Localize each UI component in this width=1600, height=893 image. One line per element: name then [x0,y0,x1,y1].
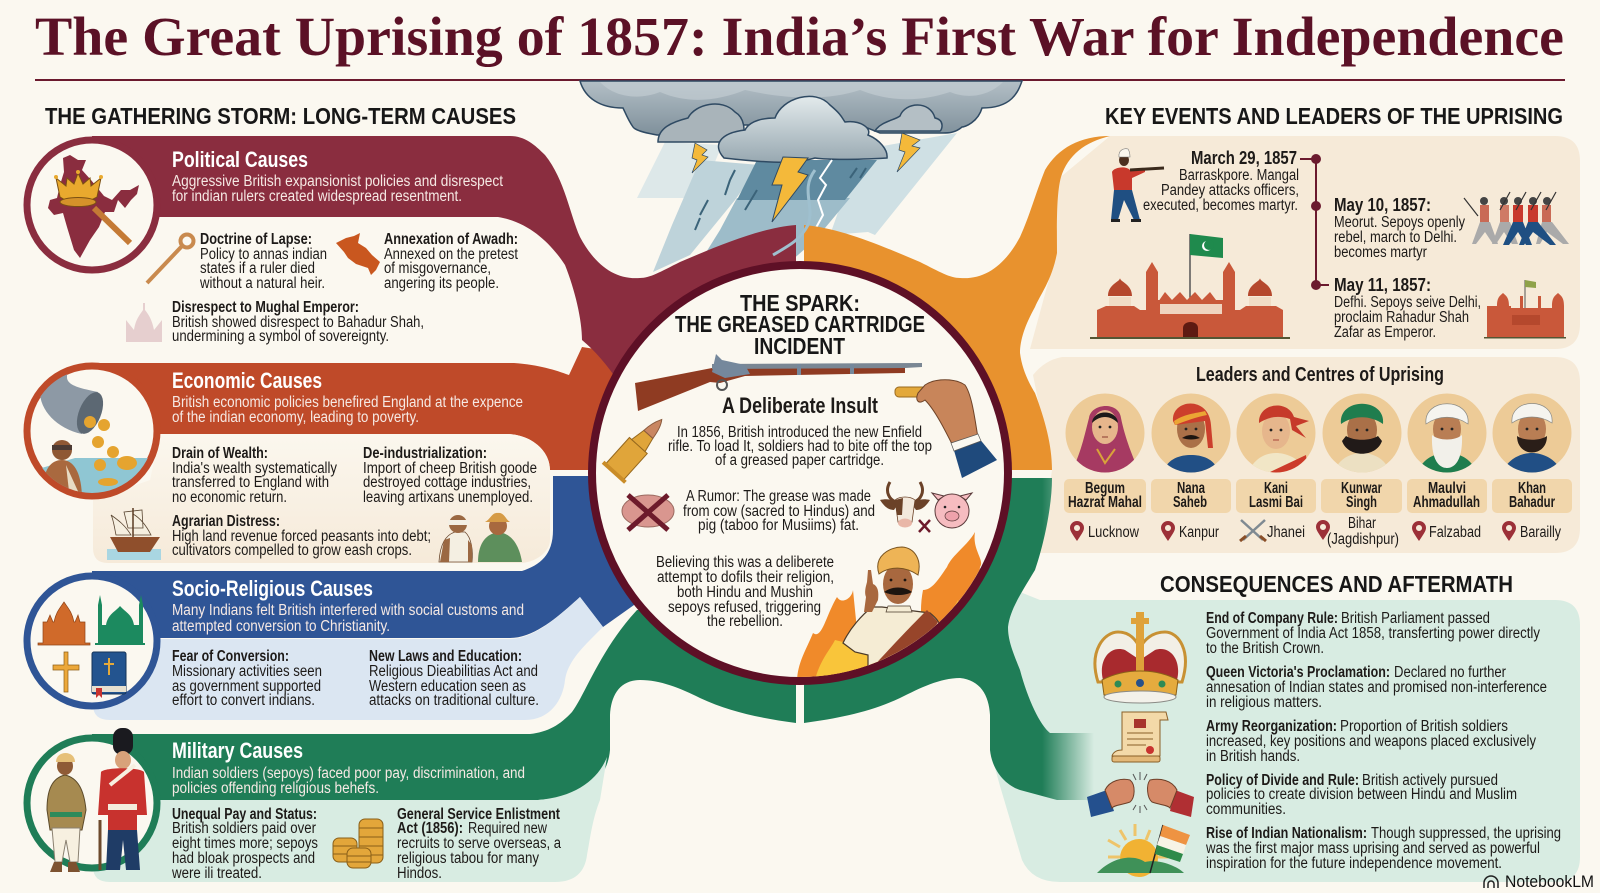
annexation of Awadh: angering its people. [384,275,499,292]
doctrine of lapse: Doctrine of Lapse: [200,231,312,248]
spark heading: THE GREASED CARTRIDGE [675,311,925,337]
unequal pay and status: were ili treated. [171,865,262,882]
leader names: Saheb [1173,494,1207,511]
general service enlistment act: religious tabou for many [397,850,539,867]
new laws and education: attacks on traditional culture. [369,692,539,709]
queen victoria's proclamation [1206,664,1547,711]
disrespect to Mughal emperor: undermining a symbol of sovereignty. [172,328,389,345]
icon: hand with cartridge [895,380,997,478]
military intro: Indian soldiers (sepoys) faced poor pay, discrimination, and [172,765,525,782]
panel: key events background [1030,136,1580,349]
military intro: policies offending religious behefs. [172,780,379,797]
army reorganization [1206,718,1536,765]
panel: socio-religious detail background [93,597,603,720]
general service enlistment act: Act (1856): [397,820,463,837]
storm tail [773,170,815,255]
panel: leaders [1064,364,1572,548]
political intro: for indian rulers created widespread resentment. [172,188,462,205]
panel: military ribbon [92,600,796,800]
economic icon: wealth drain [27,366,160,500]
economic intro: British economic policies benefired England at the expence [172,394,523,411]
text: rumor: pig (taboo for Musiims) fat. [698,517,859,534]
unequal pay and status: British soldiers paid over [172,820,316,837]
icon: sunrise with Indian flag [1097,824,1190,877]
centres with pins [1070,515,1561,548]
icon: scepter [147,234,194,283]
leader names: Ahmadullah [1413,494,1480,511]
political icon: India crown [27,140,157,270]
may 10 event: Meorut. Sepoys openly [1334,214,1465,231]
fear of conversion: effort to convert indians. [172,692,315,709]
general service enlistment act: Hindos. [397,865,442,882]
military intro [172,765,525,797]
central circle [592,265,1008,681]
portrait: Maulvi Ahmadullah [1408,394,1486,473]
orange ribbon [804,136,1110,470]
heading: consequences: CONSEQUENCES AND AFTERMATH [1160,571,1513,597]
panel: political ribbon [92,136,796,465]
annexation of Awadh [384,231,519,292]
end of company rule: British Parliament passed [1341,610,1490,627]
drain of wealth: transferred to England with [172,474,329,491]
leader names: Kunwar [1341,480,1382,497]
text: deliberate attempt: sepoys refused, triggering [668,599,821,616]
unequal pay and status: Unequal Pay and Status: [172,806,317,823]
portrait: Kunwar Singh [1322,394,1402,473]
disrespect to Mughal emperor [172,299,424,345]
annexation of Awadh: Annexation of Awadh: [384,231,518,248]
icon: coin stacks [333,819,383,868]
agrarian distress: Agrarian Distress: [172,513,280,530]
icon: Mangal Pandey with rifle [1111,149,1164,222]
drain of wealth: India's wealth systematically [172,460,337,477]
political intro: Aggressive British expansionist policies and disrespect [172,173,504,190]
icon: small fort [1484,280,1566,338]
fear of conversion: Missionary activities seen [172,663,322,680]
rise of Indian nationalism [1205,825,1561,872]
portrait: Begum Hazrat Mahal [1066,394,1144,473]
unequal pay and status: had bloak prospects and [172,850,315,867]
end of company rule: Government of India Act 1858, transferting power directly [1206,625,1540,642]
leader names: Hazrat Mahal [1068,494,1142,511]
policy of divide and rule [1206,772,1517,818]
panel: socio-religious causes [27,576,539,709]
may 10 event: becomes martyr [1334,244,1427,261]
text: enfield rifle: of a greased paper cartridge. [715,452,884,469]
text: deliberate attempt: attempt to dofils their religion, [657,569,834,586]
new laws and education: Religious Dieabilitias Act and [369,663,538,680]
leader names [1068,480,1555,511]
timeline [1300,154,1329,290]
queen victoria's proclamation: Declared no further [1394,664,1506,681]
doctrine of lapse: states if a ruler died [200,260,315,277]
unequal pay and status [171,806,318,882]
heading: causes: THE GATHERING STORM: LONG-TERM CAUSES [45,103,516,129]
text: deliberate attempt: both Hindu and Mushin [677,584,813,601]
icon: clashing fists [1087,772,1194,817]
may 11 event: May 11, 1857: [1334,275,1431,295]
de-industrialization [363,445,537,506]
centres with pins: Barailly [1520,524,1561,541]
general service enlistment act: recruits to serve overseas, a [397,835,561,852]
icon: scroll [1112,712,1168,762]
rise of Indian nationalism: inspiration for the future independence movement. [1206,855,1502,872]
de-industrialization: destroyed cottage industries, [363,474,531,491]
annexation of Awadh: of misgovernance, [384,260,491,277]
army reorganization: Proportion of British soldiers [1340,718,1508,735]
annexation of Awadh: Annexed on the pretest [384,246,519,263]
de-industrialization: De-industrialization: [363,445,487,462]
drain of wealth: no economic return. [172,489,287,506]
centres with pins: Lucknow [1088,524,1140,541]
title: The Great Uprising of 1857: India’s First War for Independence [35,6,1564,67]
end of company rule: to the British Crown. [1206,640,1324,657]
may 11 event [1334,275,1481,341]
text: enfield rifle [668,424,932,469]
disrespect to Mughal emperor: Disrespect to Mughal Emperor: [172,299,359,316]
doctrine of lapse: without a natural heir. [199,275,325,292]
fear of conversion: Fear of Conversion: [172,648,289,665]
general service enlistment act [397,806,561,882]
panel: economic ribbon base [92,347,796,470]
rise of Indian nationalism: Though suppressed, the uprising [1371,825,1561,842]
text: rumor: from cow (sacred to Hindus) and [683,503,875,520]
may 10 event: May 10, 1857: [1334,195,1431,215]
panel: economic causes [27,366,537,562]
leader names: Khan [1518,480,1546,497]
leader names: Maulvi [1428,480,1466,497]
panel: military causes: Military Causes [172,738,303,763]
may 11 event: Defhi. Sepoys seive Delhi, [1334,294,1481,311]
panel: political causes: Political Causes [172,147,308,172]
march 29 event: Barraskpore. Mangal [1179,167,1299,184]
fear of conversion [172,648,322,709]
military icon: sepoy and British soldier [27,728,157,872]
policy of divide and rule: Policy of Divide and Rule: [1206,772,1359,789]
leader names: Nana [1177,480,1205,497]
spark heading: INCIDENT [754,333,845,359]
rise of Indian nationalism: was the first major mass uprising and served as powerful [1205,840,1540,857]
panel: military detail background [93,757,607,882]
centres with pins: Kanpur [1179,524,1219,541]
economic intro: of the indian economy, leading to poverty. [172,409,419,426]
spark heading [675,290,925,359]
agrarian distress: cultivators compelled to grow eash crops. [172,542,412,559]
army reorganization: Army Reorganization: [1206,718,1337,735]
agrarian distress: High land revenue forced peasants into debt; [172,528,431,545]
green ribbon right [804,478,1094,800]
socio-religious intro [172,602,524,635]
queen victoria's proclamation: Queen Victoria's Proclamation: [1206,664,1390,681]
queen victoria's proclamation: annesation of Indian states and promised non-interference [1206,679,1547,696]
panel: socio-religious ribbon [92,476,796,638]
storm illustration [580,81,1022,272]
economic intro [172,394,523,426]
may 10 event [1334,195,1465,261]
may 11 event: proclaim Rahadur Shah [1334,309,1469,326]
icon: sepoy and flames [797,532,981,680]
icon: pig [919,493,972,532]
panel: military causes [27,728,561,882]
rise of Indian nationalism: Rise of Indian Nationalism: [1206,825,1367,842]
queen victoria's proclamation: in religious matters. [1206,694,1322,711]
icon: marching soldiers [1464,192,1569,245]
heading: a deliberate insult: A Deliberate Insult [722,393,879,418]
doctrine of lapse [199,231,327,292]
panel: economic causes: Economic Causes [172,368,322,393]
policy of divide and rule: British actively pursued [1362,772,1498,789]
may 10 event: rebel, march to Delhi. [1334,229,1457,246]
text: rumor [683,488,875,534]
portrait: Rani Lakshmi Bai [1236,394,1316,473]
icon: crossed-out meat [622,495,674,530]
march 29 event: March 29, 1857 [1191,148,1297,168]
panel: political causes [27,140,519,345]
end of company rule [1206,610,1540,657]
general service enlistment act: General Service Enlistment [397,806,560,823]
doctrine of lapse: Policy to annas indian [200,246,327,263]
icon: Red Fort with flag [1090,234,1290,339]
text: enfield rifle: In 1856, British introduced the new Enfield [677,424,922,441]
icon: faded crown [126,303,162,342]
centres with pins: Falzabad [1429,524,1481,541]
socio-religious intro: Many Indians felt British interfered with social customs and [172,602,524,619]
icon: bullet [602,409,673,484]
general service enlistment act: Required new [468,820,548,837]
march 29 event: Pandey attacks officers, [1161,182,1299,199]
policy of divide and rule: policies to create division between Hindu and Muslim [1206,786,1517,803]
icon: British crown [1095,612,1185,703]
text: deliberate attempt [656,554,834,630]
de-industrialization: leaving artixans unemployed. [363,489,533,506]
unequal pay and status: eight times more; sepoys [172,835,318,852]
march 29 event: executed, becomes martyr. [1143,197,1298,214]
text: deliberate attempt: Believing this was a deliberete [656,554,834,571]
new laws and education: Western education seen as [369,678,526,695]
icon: rifle [635,354,922,411]
panel: leaders: Leaders and Centres of Uprising [1196,364,1444,386]
panel: socio-religious causes: Socio-Religious Causes [172,576,373,601]
new laws and education [369,648,539,709]
march 29 event [1143,148,1299,214]
leader names: Kani [1264,480,1288,497]
text: enfield rifle: rifle. To load It, soldiers had to bite off the top [668,438,932,455]
NotebookLM mark: NotebookLM [1505,872,1594,891]
name plates [1064,479,1572,513]
socio-religious icons [27,576,157,706]
may 11 event: Zafar as Emperor. [1334,324,1436,341]
socio-religious intro: attempted conversion to Christianity. [172,618,390,635]
end of company rule: End of Company Rule: [1206,610,1338,627]
portrait: Nana Saheb [1152,394,1230,473]
policy of divide and rule: communities. [1206,801,1286,818]
text: deliberate attempt: the rebellion. [707,613,783,630]
icon: peasants [439,513,522,562]
centres with pins: Bihar [1348,515,1376,532]
disrespect to Mughal emperor: British showed disrespect to Bahadur Shah, [172,314,424,331]
portrait: Khan Bahadur [1492,394,1572,473]
panel: economic detail background [93,434,550,563]
panel: consequences [1087,610,1561,877]
new laws and education: New Laws and Education: [369,648,522,665]
centres with pins: (Jagdishpur) [1327,531,1399,548]
text: rumor: A Rumor: The grease was made [686,488,871,505]
agrarian distress [172,513,431,559]
de-industrialization: Import of cheep British goode [363,460,537,477]
drain of wealth: Drain of Wealth: [172,445,268,462]
political intro [172,173,504,205]
leader names: Lasmi Bai [1249,494,1303,511]
icon: ship [107,508,161,560]
fear of conversion: as government supported [172,678,321,695]
spark heading: THE SPARK: [740,290,860,316]
panel: key events [1090,148,1569,341]
drain of wealth [172,445,337,506]
army reorganization: increased, key positions and weapons placed exclusively [1206,733,1536,750]
leader names: Singh [1346,494,1377,511]
panel: leaders background [1033,357,1580,553]
army reorganization: in British hands. [1206,748,1300,765]
centres with pins: Jhanei [1267,524,1305,541]
icon: cow [880,482,930,528]
icon: Awadh map [336,233,380,275]
leader names: Begum [1085,480,1125,497]
leader names: Bahadur [1509,494,1555,511]
panel: consequences background [990,590,1580,882]
